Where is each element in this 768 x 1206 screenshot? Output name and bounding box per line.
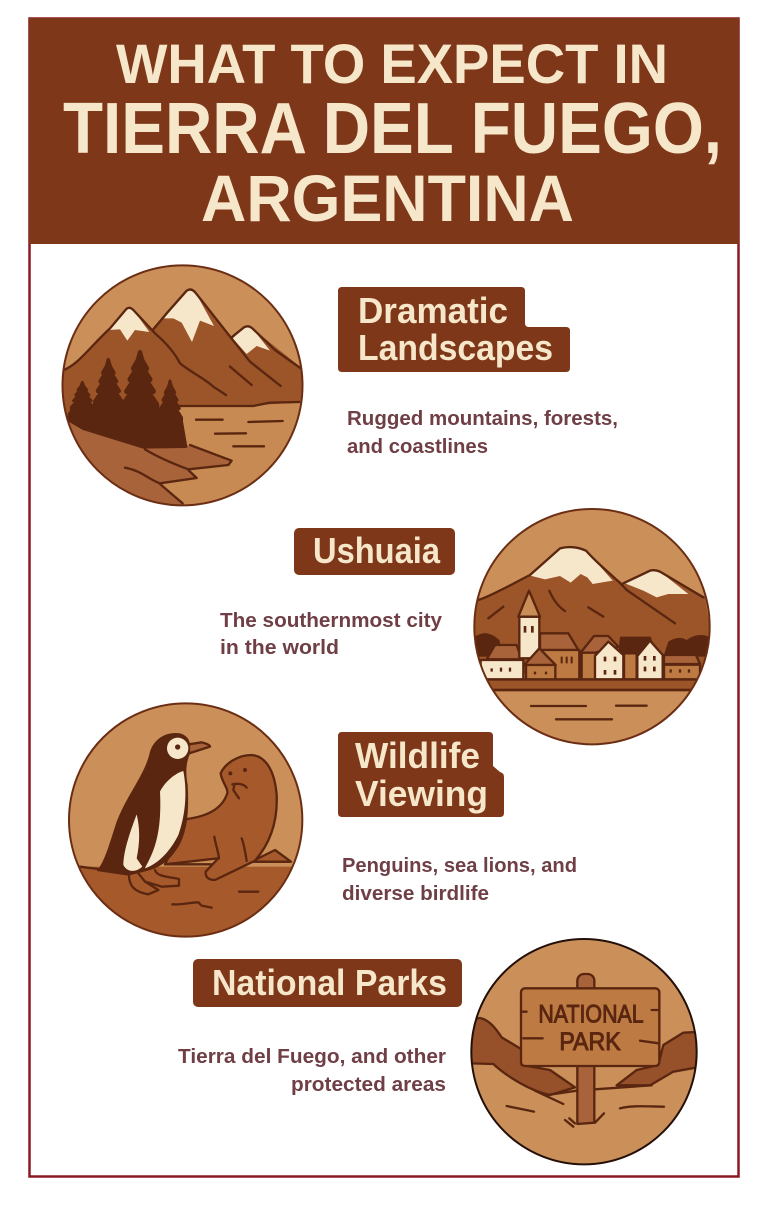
label: Wildlife Viewing bbox=[338, 732, 504, 817]
rock ridge behind sea lion bbox=[252, 850, 291, 862]
title line 3: ARGENTINA bbox=[201, 161, 574, 235]
label: Dramatic Landscapes bbox=[338, 287, 570, 372]
mountains bbox=[64, 299, 302, 416]
text: Ushuaia description bbox=[220, 610, 443, 659]
title banner bbox=[29, 18, 739, 244]
water bbox=[178, 402, 300, 420]
board bbox=[521, 988, 659, 1066]
title line 1: WHAT TO EXPECT IN bbox=[116, 32, 668, 95]
hills bbox=[470, 1018, 575, 1095]
text: wildlife description bbox=[342, 855, 577, 905]
beak bbox=[189, 742, 210, 753]
text: landscapes description bbox=[347, 408, 618, 458]
back trees bbox=[476, 633, 500, 657]
label: Ushuaia: Ushuaia bbox=[313, 530, 441, 571]
text: national parks description: protected areas bbox=[291, 1074, 446, 1096]
label: Wildlife Viewing: Wildlife bbox=[355, 735, 480, 776]
icon: mountains, forest and coast bbox=[62, 264, 304, 506]
feet bbox=[129, 870, 179, 894]
post bbox=[576, 972, 596, 988]
label: Dramatic Landscapes: Landscapes bbox=[358, 327, 553, 368]
eye bbox=[167, 738, 188, 759]
ground bbox=[80, 866, 292, 936]
label: National Parks: National Parks bbox=[212, 962, 447, 1003]
mountains bbox=[475, 564, 709, 674]
text: national parks description bbox=[178, 1046, 446, 1096]
belly and wing bbox=[145, 771, 185, 868]
label: Dramatic Landscapes: Dramatic bbox=[358, 290, 508, 331]
text: Ushuaia description: in the world bbox=[220, 637, 339, 659]
text: landscapes description: Rugged mountains, forests, bbox=[347, 408, 618, 430]
text: wildlife description: diverse birdlife bbox=[342, 883, 489, 905]
ground marks bbox=[172, 892, 258, 908]
text: landscapes description: and coastlines bbox=[347, 436, 488, 458]
sea lion bbox=[165, 755, 277, 880]
board text: NATIONAL bbox=[538, 1001, 644, 1029]
text: wildlife description: Penguins, sea lions, and bbox=[342, 855, 577, 877]
title line 2: TIERRA DEL FUEGO, bbox=[63, 89, 722, 169]
town buildings bbox=[487, 645, 522, 659]
trees bbox=[68, 353, 186, 447]
shore bbox=[70, 422, 230, 504]
icon: national park sign: PARK bbox=[559, 1028, 621, 1056]
icon: Ushuaia town and mountains bbox=[470, 507, 717, 750]
label: Wildlife Viewing: Viewing bbox=[355, 773, 488, 814]
icon: national park sign bbox=[467, 937, 703, 1167]
quay and water bbox=[488, 680, 696, 689]
icon: penguin and sea lion bbox=[65, 700, 308, 942]
text: Ushuaia description: The southernmost city bbox=[220, 610, 443, 632]
penguin body bbox=[97, 733, 190, 876]
text: national parks description: Tierra del Fuego, and other bbox=[178, 1046, 446, 1068]
